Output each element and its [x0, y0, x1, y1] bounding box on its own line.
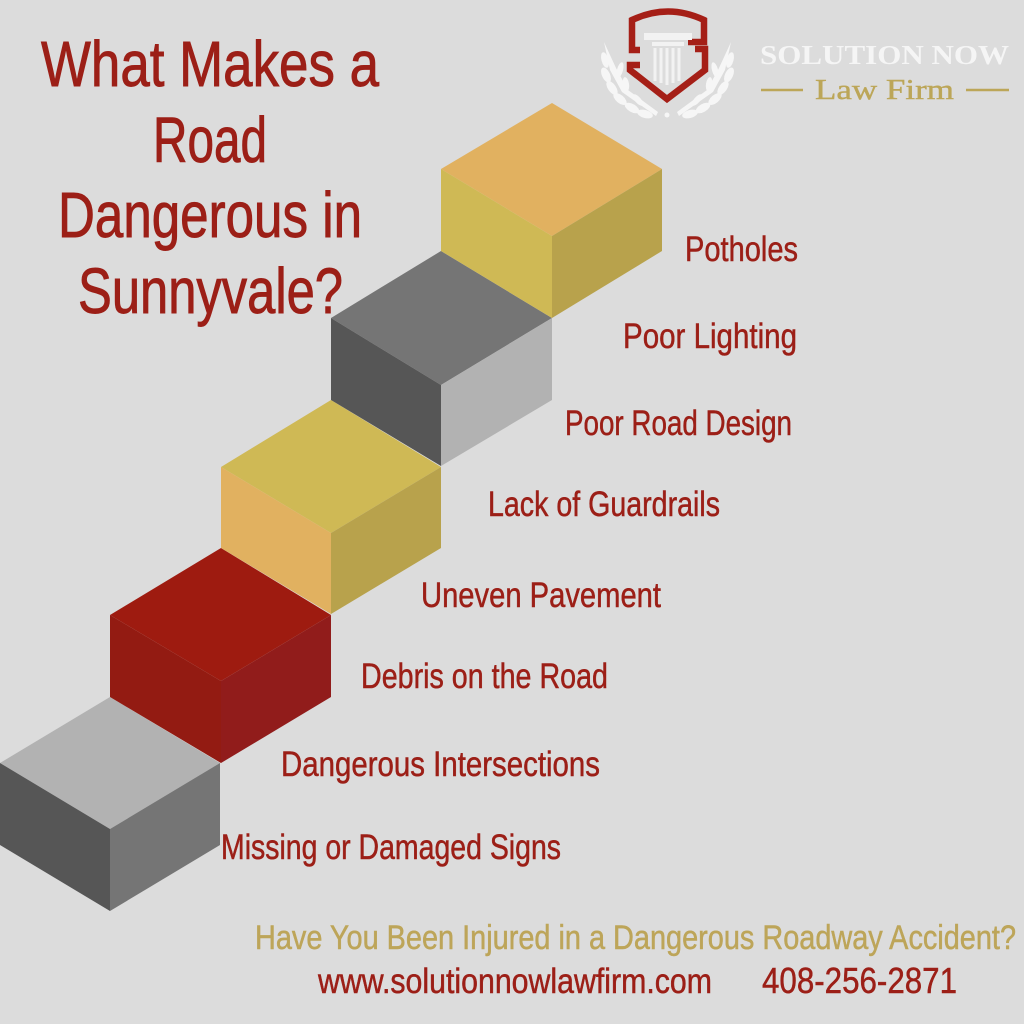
title: Sunnyvale?	[78, 255, 343, 327]
logo subtitle: Law Firm	[815, 75, 954, 106]
title: Dangerous in	[58, 179, 362, 251]
label: Debris on the Road: Debris on the Road	[361, 657, 608, 696]
label: Missing or Damaged Signs: Missing or Damaged Signs	[221, 828, 561, 867]
title: What Makes a	[41, 28, 379, 100]
logo	[599, 12, 1009, 120]
cube: missing or damaged signs	[0, 697, 220, 911]
website: www.solutionnowlawfirm.com	[317, 962, 712, 1001]
title: Road	[153, 104, 267, 176]
label: Uneven Pavement: Uneven Pavement	[421, 576, 661, 615]
label: Potholes: Potholes	[685, 230, 798, 269]
cube: poor road design	[331, 251, 552, 466]
logo name: SOLUTION NOW	[760, 40, 1009, 70]
icon: laurel left	[599, 42, 658, 120]
label: Poor Road Design: Poor Road Design	[565, 404, 792, 443]
cube: potholes	[441, 103, 662, 318]
cube: debris on the road	[110, 548, 331, 763]
phone: 408-256-2871	[762, 960, 957, 1001]
cube: uneven pavement	[221, 400, 441, 614]
label: Poor Lighting: Poor Lighting	[623, 317, 797, 356]
icon: shield with column	[630, 12, 705, 99]
icon: laurel right	[664, 42, 736, 120]
label: Dangerous Intersections: Dangerous Intersections	[281, 745, 600, 784]
title	[41, 28, 379, 327]
label: Lack of Guardrails: Lack of Guardrails	[488, 485, 720, 524]
